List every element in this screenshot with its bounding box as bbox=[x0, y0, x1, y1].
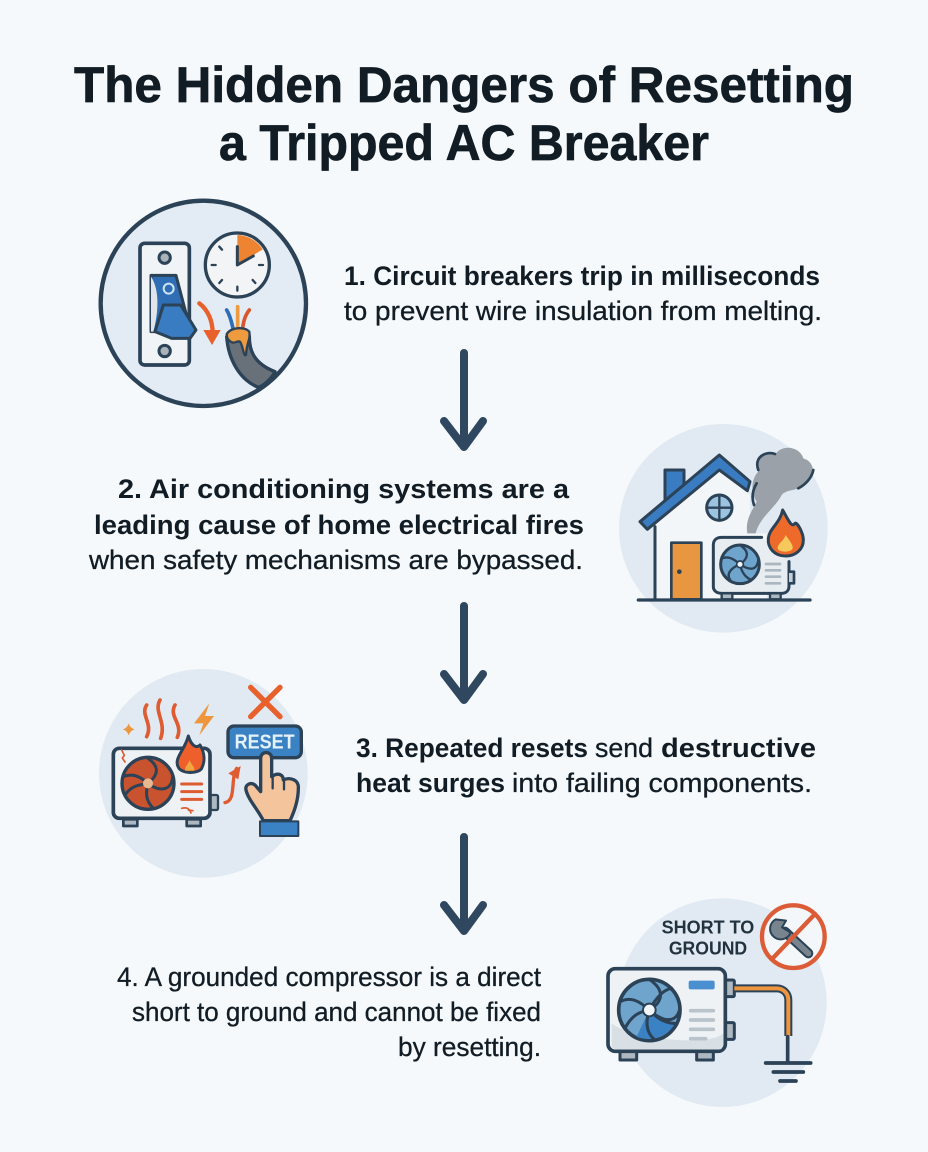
step 3 text: 3. Repeated resets bbox=[356, 733, 588, 763]
title: a Tripped AC Breaker bbox=[219, 114, 709, 171]
step 1 text: 1. Circuit breakers trip in milliseconds bbox=[344, 261, 820, 291]
step 4 text: by resetting. bbox=[398, 1032, 541, 1062]
step 4 text bbox=[117, 962, 541, 1062]
icon: house with burning AC unit bbox=[619, 424, 828, 633]
icon: breaker switch, clock and melted wire bbox=[101, 201, 306, 406]
step 3 text: destructive bbox=[661, 733, 816, 763]
step 3 text: heat surges bbox=[356, 768, 505, 798]
step 2 text: when safety mechanisms are bypassed. bbox=[88, 545, 583, 575]
step 1 text: to prevent wire insulation from melting. bbox=[344, 296, 822, 326]
icon: overheating AC unit and reset button bbox=[99, 669, 308, 878]
step 1 text bbox=[344, 261, 822, 326]
step 3 text: send bbox=[595, 733, 653, 763]
arrow 2 bbox=[444, 606, 483, 700]
arrow 3 bbox=[444, 837, 483, 931]
icon: AC unit shorted to ground bbox=[608, 898, 827, 1107]
arrow 1 bbox=[444, 353, 483, 447]
step 2 text bbox=[88, 474, 584, 575]
icon: AC unit shorted to ground: GROUND bbox=[669, 937, 747, 958]
step 4 text: 4. A grounded compressor is a direct bbox=[117, 962, 541, 992]
title: The Hidden Dangers of Resetting bbox=[74, 56, 854, 113]
icon: overheating AC unit and reset button: RESET bbox=[235, 731, 295, 753]
title bbox=[74, 56, 854, 171]
step 2 text: leading cause of home electrical fires bbox=[94, 510, 584, 540]
step 3 text: into failing components. bbox=[512, 768, 812, 798]
icon: AC unit shorted to ground: SHORT TO bbox=[662, 916, 754, 937]
step 4 text: short to ground and cannot be fixed bbox=[132, 997, 541, 1027]
step 3 text bbox=[356, 733, 816, 798]
step 2 text: 2. Air conditioning systems are a bbox=[118, 474, 570, 504]
